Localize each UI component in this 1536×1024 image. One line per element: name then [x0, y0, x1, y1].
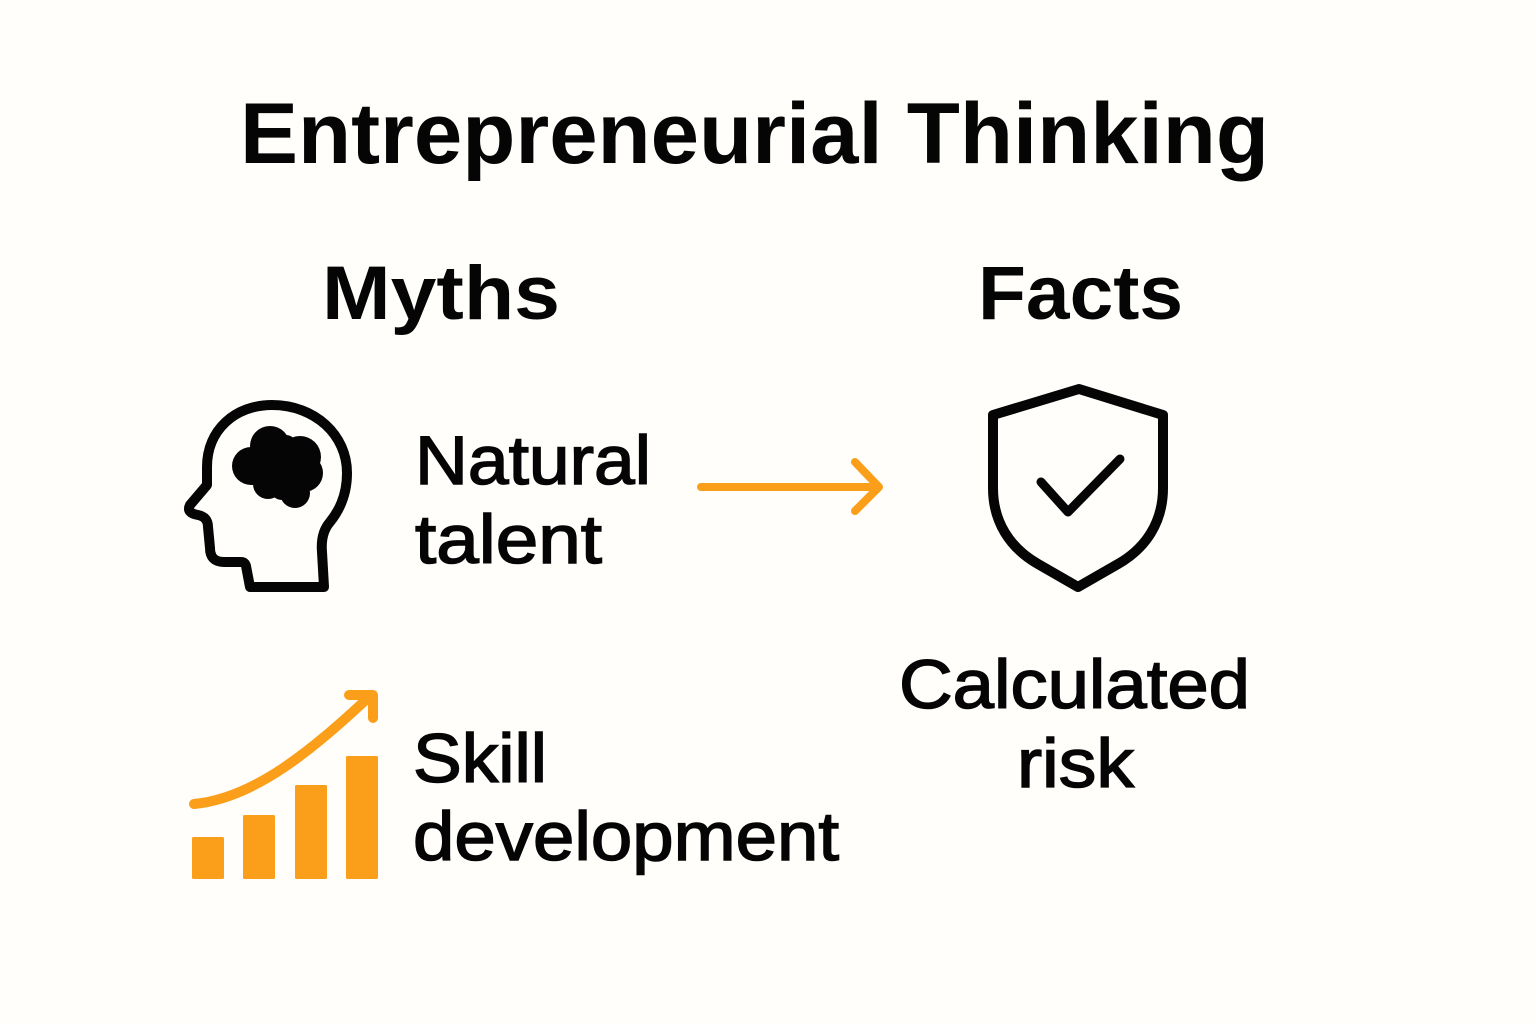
label: Skill development: development: [413, 798, 839, 875]
label: Calculated risk: Calculated: [899, 646, 1250, 723]
label: Calculated risk: [899, 646, 1250, 802]
heading: Myths: Myths: [322, 251, 560, 336]
brain: [232, 426, 323, 508]
growth arrow: [194, 695, 373, 804]
icon: head with brain: [189, 405, 347, 587]
label: Calculated risk: risk: [1017, 725, 1135, 802]
icon: shield with check: [993, 389, 1163, 587]
label: Skill development: Skill: [413, 720, 547, 797]
bars: [192, 756, 378, 879]
heading: Facts: Facts: [978, 251, 1183, 336]
label: Natural talent: Natural: [415, 422, 651, 499]
label: Natural talent: talent: [415, 501, 602, 578]
label: Natural talent: [415, 422, 651, 578]
arrow: myth to fact: [701, 462, 879, 511]
icon: growth bar chart: [192, 695, 378, 879]
title: Entrepreneurial Thinking: [240, 86, 1269, 182]
label: Skill development: [413, 720, 839, 875]
